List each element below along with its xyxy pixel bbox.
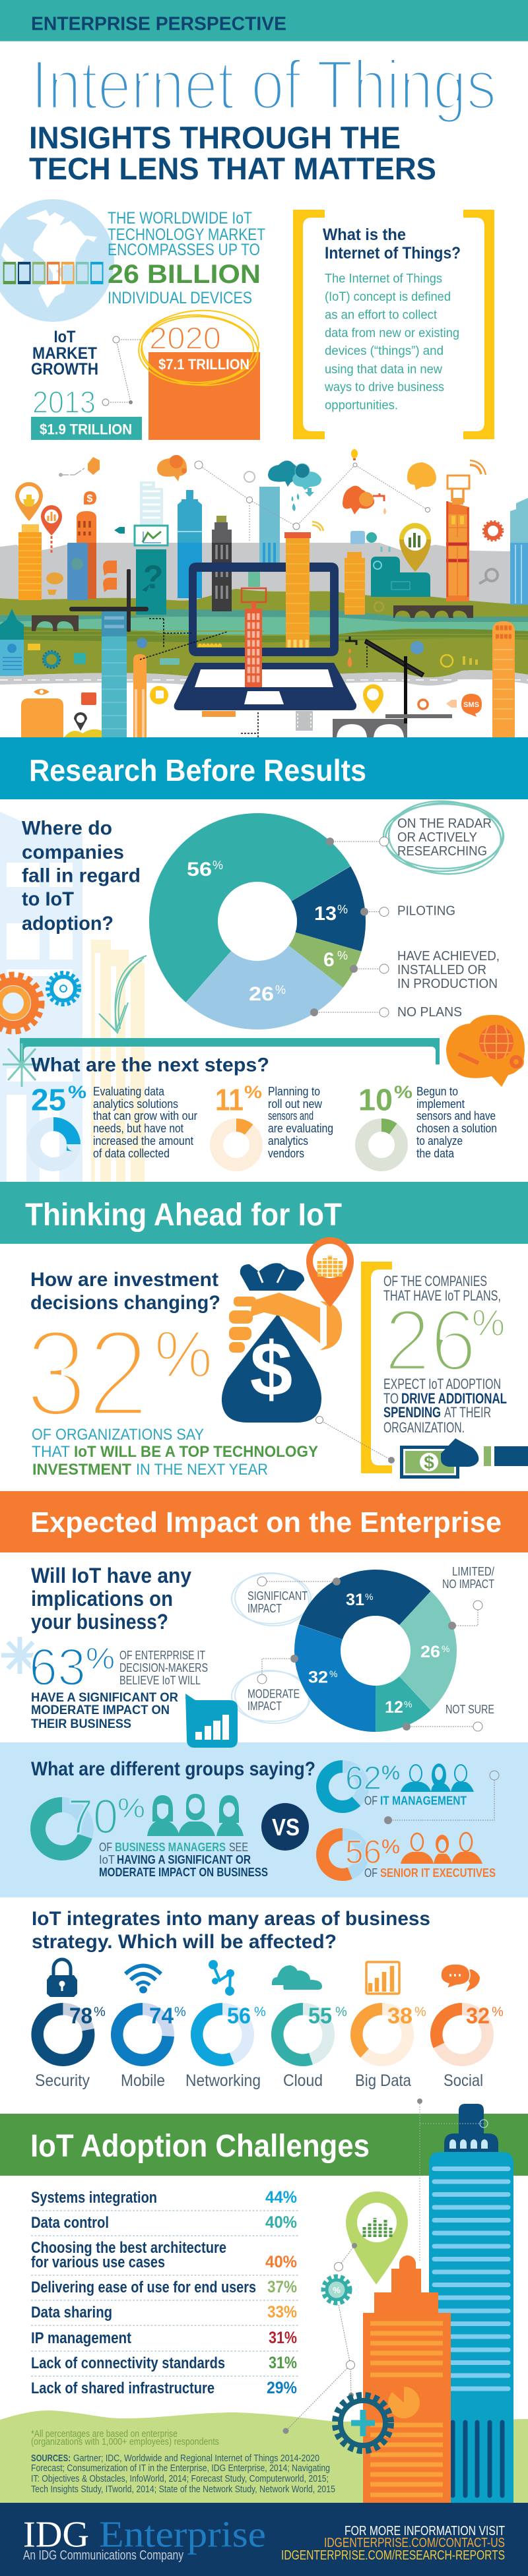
group: business managers: BUSINESS MANAGERS xyxy=(115,1841,226,1854)
table: adoption challenges: Systems integration xyxy=(31,2189,157,2207)
table: adoption challenges: IP management xyxy=(31,2329,131,2347)
donut values xyxy=(308,1591,449,1717)
donut labels: NO IMPACT xyxy=(442,1578,494,1591)
market size text: ENCOMPASSES UP TO xyxy=(108,241,260,259)
stat: 26 percent: ORGANIZATION. xyxy=(383,1419,465,1436)
VS badge: VS xyxy=(272,1814,300,1841)
heading: where do companies fall: to IoT xyxy=(22,888,74,910)
area: mobile: 74 xyxy=(149,2004,174,2029)
connector: bag to banknote xyxy=(315,1417,395,1463)
stat: 10 percent xyxy=(358,1082,497,1165)
table: adoption challenges: for various use cases xyxy=(31,2254,165,2271)
stat: 26 percent: OF THE COMPANIES xyxy=(383,1273,487,1289)
donut values: 32 xyxy=(308,1669,328,1687)
stat: 63 percent: THEIR BUSINESS xyxy=(31,1717,131,1731)
icons: location pins and bubbles: SMS xyxy=(463,701,479,709)
market size text: THE WORLDWIDE IoT xyxy=(108,209,252,228)
title: TECH LENS THAT MATTERS xyxy=(29,151,436,186)
panel: adoption stage xyxy=(0,797,505,1182)
sources: Tech Insights Study, ITworld, 2014; State of the Network Study, Network World, 2015 xyxy=(31,2484,335,2495)
donut labels xyxy=(248,1565,494,1716)
icon: teal asterisk xyxy=(3,1043,41,1087)
stat caption: 32 percent: OF ORGANIZATIONS SAY xyxy=(32,1426,204,1444)
donut values: 12 xyxy=(385,1698,403,1717)
stat: 63 percent: DECISION-MAKERS xyxy=(119,1661,208,1674)
donut legend: INSTALLED OR xyxy=(397,963,486,977)
stat: 25 percent: that can grow with our xyxy=(93,1109,197,1122)
table: adoption challenges: 31% xyxy=(269,2329,297,2347)
call to action links xyxy=(281,2524,505,2563)
icons: location pins and bubbles xyxy=(15,449,503,731)
group: senior IT executives: % xyxy=(381,1836,400,1858)
header band xyxy=(0,0,528,41)
bar chart: IoT market growth: GROWTH xyxy=(31,360,98,379)
stat: 26 percent: 26 xyxy=(384,1292,477,1390)
city ground: mountains, land, river and road xyxy=(0,543,528,686)
heading: implications: implications on xyxy=(31,1587,173,1610)
footnote xyxy=(31,2428,219,2447)
area: security: 78 xyxy=(69,2004,92,2029)
bar chart: IoT market growth: MARKET xyxy=(32,344,97,363)
table: adoption challenges: 40% xyxy=(265,2253,297,2271)
stat: 32 percent: 32 xyxy=(25,1304,149,1442)
footer xyxy=(0,2503,528,2576)
donut chart: adoption stage xyxy=(153,817,362,1026)
icon: three business managers xyxy=(147,1794,244,1836)
title: INSIGHTS THROUGH THE xyxy=(29,120,401,155)
stat: 11 percent: % xyxy=(244,1082,262,1102)
bracket right xyxy=(463,210,494,439)
table: adoption challenges: Lack of shared infrastructure xyxy=(31,2379,214,2397)
stat: 63 percent: OF ENTERPRISE IT xyxy=(119,1649,205,1662)
donut values: % xyxy=(329,1669,337,1679)
panel: investment decisions xyxy=(25,1237,528,1479)
section banner: expected impact: Expected Impact on the Enterprise xyxy=(30,1506,502,1539)
group: business managers xyxy=(32,1789,268,1879)
donut values: % xyxy=(213,859,223,872)
donut connectors xyxy=(257,1577,482,1731)
group: senior IT executives xyxy=(316,1828,496,1881)
icon: three IT managers xyxy=(401,1763,474,1792)
stat: 26 percent: SPENDING xyxy=(383,1404,441,1421)
definition body: devices (“things”) and xyxy=(325,344,444,358)
stat: 25 percent: analytics solutions xyxy=(93,1097,178,1111)
stat: 63 percent: 63 xyxy=(29,1638,86,1696)
area: social xyxy=(428,1964,504,2090)
scribbles around impact labels xyxy=(232,1570,311,1727)
heading: groups: What are different groups saying? xyxy=(31,1758,315,1780)
donut legend xyxy=(397,816,500,1020)
stat: 11 percent: 11 xyxy=(215,1083,244,1117)
area: networking: % xyxy=(254,2005,266,2019)
group: senior IT executives: 56 xyxy=(345,1833,381,1870)
group: business managers: % xyxy=(117,1793,145,1824)
table: adoption challenges xyxy=(31,2188,298,2397)
area: cloud xyxy=(271,1965,347,2090)
definition heading xyxy=(323,226,461,262)
connector: between IT groups xyxy=(384,1771,499,1824)
icon: location pin with bars xyxy=(306,1237,354,1307)
area: big data: % xyxy=(414,2005,426,2019)
table: adoption challenges: 33% xyxy=(267,2303,297,2321)
heading: business strategy xyxy=(32,1908,430,1953)
icon: three senior executives xyxy=(401,1833,482,1864)
stat: 11 percent: analytics xyxy=(268,1134,308,1148)
icon: hand with banknote xyxy=(400,1438,528,1479)
logo: IDG Enterprise: Enterprise xyxy=(99,2514,266,2555)
icons: location pins and bubbles: $ xyxy=(87,493,93,505)
group: IT management xyxy=(314,1758,474,1815)
foreground towers xyxy=(0,532,515,737)
bar chart: IoT market growth: 2013 xyxy=(32,384,96,419)
title xyxy=(29,46,496,186)
section banner: adoption challenges xyxy=(0,2114,528,2176)
stat: 25 percent xyxy=(31,1082,197,1165)
VS badge xyxy=(261,1803,309,1851)
bar chart: IoT market growth xyxy=(31,307,261,440)
section banner: research before results: Research Before Results xyxy=(29,753,366,787)
area: networking: Networking xyxy=(185,2071,261,2090)
area: social: Social xyxy=(444,2071,483,2090)
donut values: 26 xyxy=(249,983,274,1005)
area: mobile: % xyxy=(174,2005,186,2019)
table: adoption challenges: Delivering ease of use for end users xyxy=(31,2279,256,2296)
icon: green location pin xyxy=(346,2192,408,2285)
market size text xyxy=(108,209,265,307)
green ground xyxy=(0,2410,528,2503)
heading: implications: your business? xyxy=(31,1610,168,1634)
stat: 63 percent: BELIEVE IoT WILL xyxy=(119,1674,201,1687)
donut chart: expected impact xyxy=(294,1569,457,1733)
stat: 26 percent: AT THEIR xyxy=(444,1404,491,1421)
footnote: *All percentages are based on enterprise xyxy=(31,2428,178,2439)
group: IT management: OF xyxy=(364,1794,378,1807)
group: senior IT executives: OF xyxy=(364,1866,378,1880)
logo: IDG Enterprise: IDG xyxy=(23,2514,89,2555)
legend connectors xyxy=(310,837,389,1017)
stat: 63 percent: MODERATE IMPACT ON xyxy=(31,1703,170,1717)
donut legend: OR ACTIVELY xyxy=(397,830,477,845)
definition body: ways to drive business xyxy=(324,381,444,394)
icon: money bag held by hand: $ xyxy=(250,1326,292,1412)
heading: next steps: What are the next steps? xyxy=(31,1054,269,1076)
stat: 11 percent: Planning to xyxy=(268,1085,320,1098)
group: IT management: 62 xyxy=(345,1760,381,1796)
logo: IDG Enterprise: An IDG Communications Company xyxy=(23,2548,183,2563)
donut legend: IN PRODUCTION xyxy=(397,977,498,991)
area: cloud: 55 xyxy=(308,2004,332,2029)
heading: implications xyxy=(31,1564,191,1634)
icon: hand-drawn arrow xyxy=(99,956,147,1033)
stat: 63 percent xyxy=(29,1638,208,1731)
definition body: (IoT) concept is defined xyxy=(325,290,451,304)
panel: business strategy areas xyxy=(32,1908,504,2090)
stat: 25 percent: 25 xyxy=(31,1083,66,1117)
stat: 26 percent xyxy=(383,1273,507,1436)
connectors: gears and nodes xyxy=(282,2243,357,2434)
heading: investment decisions: How are investment xyxy=(30,1269,218,1291)
network connector lines xyxy=(195,461,430,542)
sources: IT: Objectives & Obstacles, InfoWorld, 2014; Forecast Study, Computerworld, 2015; xyxy=(31,2473,329,2484)
donut values: 6 xyxy=(323,949,335,971)
group: senior IT executives: SENIOR IT EXECUTIVES xyxy=(380,1866,496,1880)
illustration: skyscrapers xyxy=(363,2104,513,2503)
area: big data xyxy=(346,1962,426,2090)
stat: 10 percent: chosen a solution xyxy=(416,1122,497,1135)
section banner: thinking ahead: Thinking Ahead for IoT xyxy=(25,1198,342,1233)
stat: 10 percent: Begun to xyxy=(416,1085,458,1098)
area: security: % xyxy=(94,2005,106,2019)
stat: 10 percent: sensors and have xyxy=(416,1109,496,1122)
icon: pale asterisk xyxy=(1,1637,40,1674)
table: adoption challenges: 40% xyxy=(265,2213,297,2232)
icon: laptop xyxy=(174,563,356,717)
icon: blue gear xyxy=(48,973,79,1004)
stat: 25 percent: % xyxy=(68,1082,86,1102)
stat: 26 percent: % xyxy=(472,1302,505,1344)
bar chart: IoT market growth: IoT xyxy=(54,328,75,346)
area: big data: 38 xyxy=(387,2004,412,2029)
icon: orange speech bubble with globe xyxy=(446,1015,525,1087)
stat: 10 percent: % xyxy=(394,1082,412,1102)
stat: 11 percent xyxy=(215,1082,333,1165)
stat: 10 percent: to analyze xyxy=(416,1134,463,1148)
definition heading: Internet of Things? xyxy=(325,244,461,262)
logo: IDG Enterprise xyxy=(23,2514,266,2563)
area: mobile: Mobile xyxy=(121,2071,165,2090)
table: adoption challenges: Data control xyxy=(31,2214,109,2232)
donut values: % xyxy=(365,1591,373,1602)
icon: money bag held by hand xyxy=(222,1263,342,1423)
area: cloud: % xyxy=(335,2005,347,2019)
stat: 63 percent: % xyxy=(86,1641,115,1675)
market size text: INDIVIDUAL DEVICES xyxy=(108,289,252,307)
icon: chart speech bubble xyxy=(185,1694,238,1748)
donut values: 56 xyxy=(187,859,212,880)
panel: market size xyxy=(0,199,265,322)
bar chart: IoT market growth: $1.9 TRILLION xyxy=(40,421,132,438)
bracket left xyxy=(361,1262,392,1473)
background towers xyxy=(18,475,528,615)
dotted connector and target xyxy=(417,2099,488,2262)
stat caption: 32 percent: INVESTMENT xyxy=(32,1461,131,1479)
illustration: connected city xyxy=(0,449,528,739)
stat: 25 percent: Evaluating data xyxy=(93,1085,165,1098)
donut values: % xyxy=(442,1643,449,1654)
stat: 25 percent: of data collected xyxy=(93,1147,170,1160)
heading: where do companies fall: adoption? xyxy=(22,913,114,935)
stat caption: 32 percent: IN THE NEXT YEAR xyxy=(136,1461,268,1479)
orange tower xyxy=(363,2255,451,2503)
area: cloud: Cloud xyxy=(283,2071,323,2090)
group: business managers: SEE xyxy=(229,1841,248,1854)
donut legend: NO PLANS xyxy=(397,1005,462,1020)
stat caption: 32 percent xyxy=(32,1426,318,1479)
bar chart: IoT market growth: 2020 xyxy=(149,321,221,355)
table: adoption challenges: Data sharing xyxy=(31,2304,112,2321)
heading: investment decisions: decisions changing? xyxy=(30,1292,220,1314)
group: business managers: 70 xyxy=(68,1789,118,1844)
stat: 11 percent: vendors xyxy=(268,1147,304,1160)
area: networking xyxy=(185,1960,266,2090)
icon: row of phones xyxy=(3,262,104,284)
donut labels: SIGNIFICANT xyxy=(248,1589,308,1603)
area: social: % xyxy=(492,2005,504,2019)
stat: 10 percent: 10 xyxy=(358,1083,393,1117)
group: business managers: HAVING A SIGNIFICANT OR xyxy=(117,1853,251,1866)
bracket top xyxy=(20,1038,440,1064)
panel: different groups xyxy=(0,1742,528,1897)
heading: business strategy: strategy. Which will be affected? xyxy=(32,1931,337,1953)
panel: implications on business xyxy=(1,1564,494,1733)
definition body: data from new or existing xyxy=(325,326,459,340)
stat: 25 percent: needs, but have not xyxy=(93,1122,183,1135)
donut labels: IMPACT xyxy=(248,1602,282,1615)
group: IT management: % xyxy=(381,1762,400,1784)
background pale buildings xyxy=(0,812,145,1182)
stat: 10 percent: the data xyxy=(416,1147,455,1160)
stat: 63 percent: HAVE A SIGNIFICANT OR xyxy=(31,1690,178,1705)
icon: small teal gear xyxy=(323,2277,350,2303)
icon: large dark teal gear xyxy=(335,2395,391,2451)
icon: hand with banknote: $ xyxy=(424,1452,434,1473)
group: IT management: IT MANAGEMENT xyxy=(380,1794,467,1807)
section banner: expected impact xyxy=(0,1491,528,1552)
donut values: % xyxy=(404,1699,412,1709)
donut legend: PILOTING xyxy=(397,904,455,918)
donut values: 13 xyxy=(314,903,337,925)
stat: 11 percent: are evaluating xyxy=(268,1122,333,1135)
heading: investment decisions xyxy=(30,1269,220,1314)
donut legend: HAVE ACHIEVED, xyxy=(397,949,500,964)
donut values: % xyxy=(275,983,286,997)
icon: globe xyxy=(0,199,114,322)
donut values: 31 xyxy=(346,1591,364,1609)
section banner: adoption challenges: IoT Adoption Challenges xyxy=(30,2129,370,2164)
area: security xyxy=(33,1959,106,2090)
stat: 11 percent: sensors and xyxy=(268,1109,314,1122)
group: business managers: MODERATE IMPACT ON BUSINESS xyxy=(99,1866,268,1879)
definition heading: What is the xyxy=(323,226,406,244)
table: adoption challenges: 31% xyxy=(269,2354,297,2372)
icon: small teal gear: % xyxy=(333,2285,341,2295)
donut labels: NOT SURE xyxy=(446,1703,494,1716)
background towers: ? xyxy=(143,559,163,596)
definition body: opportunities. xyxy=(325,398,398,413)
donut legend: ON THE RADAR xyxy=(397,816,492,831)
definition body: as an effort to collect xyxy=(325,309,438,322)
bracket left xyxy=(293,210,325,439)
donut values: % xyxy=(337,903,348,916)
footnote: (organizations with 1,000+ employees) respondents xyxy=(31,2436,219,2447)
header band: ENTERPRISE PERSPECTIVE xyxy=(31,13,286,34)
stat: 11 percent: roll out new xyxy=(268,1097,323,1111)
group: business managers: OF xyxy=(99,1841,112,1854)
heading: where do companies fall xyxy=(22,818,141,935)
market size text: 26 BILLION xyxy=(108,260,261,289)
stat caption: 32 percent: THAT xyxy=(32,1443,70,1461)
stat: 10 percent: implement xyxy=(416,1097,465,1111)
heading: implications: Will IoT have any xyxy=(31,1564,191,1587)
group: business managers: IoT xyxy=(99,1853,115,1866)
definition body: using that data in new xyxy=(325,363,442,377)
section banner: research before results xyxy=(0,737,528,799)
area: security: Security xyxy=(35,2071,90,2090)
area: big data: Big Data xyxy=(355,2071,411,2090)
icon: cranes xyxy=(69,569,452,739)
donut legend: RESEARCHING xyxy=(397,844,487,859)
heading: where do companies fall: fall in regard xyxy=(22,865,141,886)
stat caption: 32 percent: IoT WILL BE A TOP TECHNOLOGY xyxy=(74,1443,318,1461)
table: adoption challenges: Lack of connectivity standards xyxy=(31,2354,225,2372)
blue tower xyxy=(429,2104,513,2503)
definition body: The Internet of Things xyxy=(325,272,442,286)
definition body xyxy=(324,272,459,413)
table: adoption challenges: 29% xyxy=(267,2379,297,2397)
donut labels: IMPACT xyxy=(248,1700,282,1713)
table: adoption challenges: 44% xyxy=(265,2188,297,2207)
heading: where do companies fall: Where do xyxy=(22,818,112,839)
donut labels: MODERATE xyxy=(248,1687,300,1700)
bar chart: IoT market growth: $7.1 TRILLION xyxy=(158,356,249,373)
panel: what is the Internet of Things xyxy=(293,210,494,439)
icon: arch bridges xyxy=(32,605,473,737)
donut values: 26 xyxy=(420,1643,440,1661)
table: adoption challenges: Choosing the best architecture xyxy=(31,2239,226,2257)
scribble around highlighted legend item xyxy=(383,797,505,878)
donut values xyxy=(187,859,348,1005)
stat: 25 percent: increased the amount xyxy=(93,1134,193,1148)
panel: next steps xyxy=(3,1015,525,1165)
icon: orange gear xyxy=(0,975,42,1031)
table: adoption challenges: 37% xyxy=(267,2278,297,2296)
area: social: 32 xyxy=(466,2004,490,2029)
donut labels: LIMITED/ xyxy=(452,1565,494,1578)
sources xyxy=(31,2453,335,2495)
sources: Forecast; Consumerization of IT in the Enterprise, IDG Enterprise, 2014; Navigating xyxy=(31,2463,330,2474)
stat: 32 percent: % xyxy=(154,1318,213,1392)
section banner: thinking ahead xyxy=(0,1182,528,1244)
market size text: TECHNOLOGY MARKET xyxy=(108,226,265,244)
donut values: % xyxy=(337,949,348,962)
heading: business strategy: IoT integrates into many areas of business xyxy=(32,1908,430,1930)
area: mobile xyxy=(116,1965,186,2090)
area: networking: 56 xyxy=(227,2004,251,2029)
heading: where do companies fall: companies xyxy=(22,842,124,863)
sources: Gartner; IDC, Worldwide and Regional Internet of Things 2014-2020 xyxy=(73,2453,319,2464)
stat: 26 percent: TO xyxy=(383,1390,399,1407)
sources: SOURCES: xyxy=(31,2453,71,2464)
